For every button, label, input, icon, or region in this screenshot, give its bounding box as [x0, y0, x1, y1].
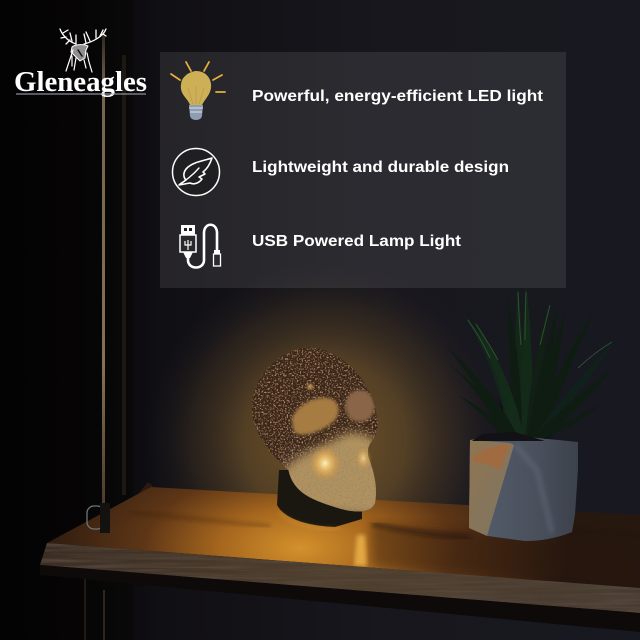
- logo underline: [16, 94, 146, 95]
- filament glow: [308, 445, 342, 482]
- skull body: [252, 348, 378, 512]
- shelf underside: [40, 565, 640, 632]
- potted plant: [445, 283, 616, 541]
- shelf side rail: [113, 482, 153, 532]
- shelf reflections: [130, 512, 640, 586]
- feature panel: USB Powered Lamp Light: [252, 233, 462, 250]
- lamp base: [277, 470, 362, 527]
- feature panel: Lightweight and durable design: [252, 159, 509, 176]
- logo: [14, 29, 147, 98]
- leaf highlights: [468, 292, 612, 368]
- feature text: Powerful, energy-efficient LED light: [252, 88, 544, 105]
- icon: feather in circle: [172, 148, 220, 196]
- wooden shelf: [40, 482, 640, 632]
- icon: stag head: [60, 29, 106, 72]
- plant leaves: [445, 283, 616, 440]
- plant pot: [469, 432, 578, 541]
- lower face: [280, 433, 383, 517]
- shelf front edge: [40, 543, 640, 613]
- shelf top: [47, 487, 640, 588]
- feature panel: [160, 52, 566, 288]
- cranium speckle: [252, 348, 378, 512]
- shelf upright rods: [84, 0, 133, 640]
- eye sockets: [292, 398, 339, 435]
- skull lamp: [252, 348, 378, 527]
- plant crown shadow: [501, 390, 549, 450]
- brand name: Gleneagles: [14, 67, 147, 98]
- metal ring clip: [87, 503, 110, 533]
- icon: light bulb: [171, 62, 225, 120]
- base light spill: [279, 512, 340, 529]
- icon: usb cable: [180, 225, 220, 268]
